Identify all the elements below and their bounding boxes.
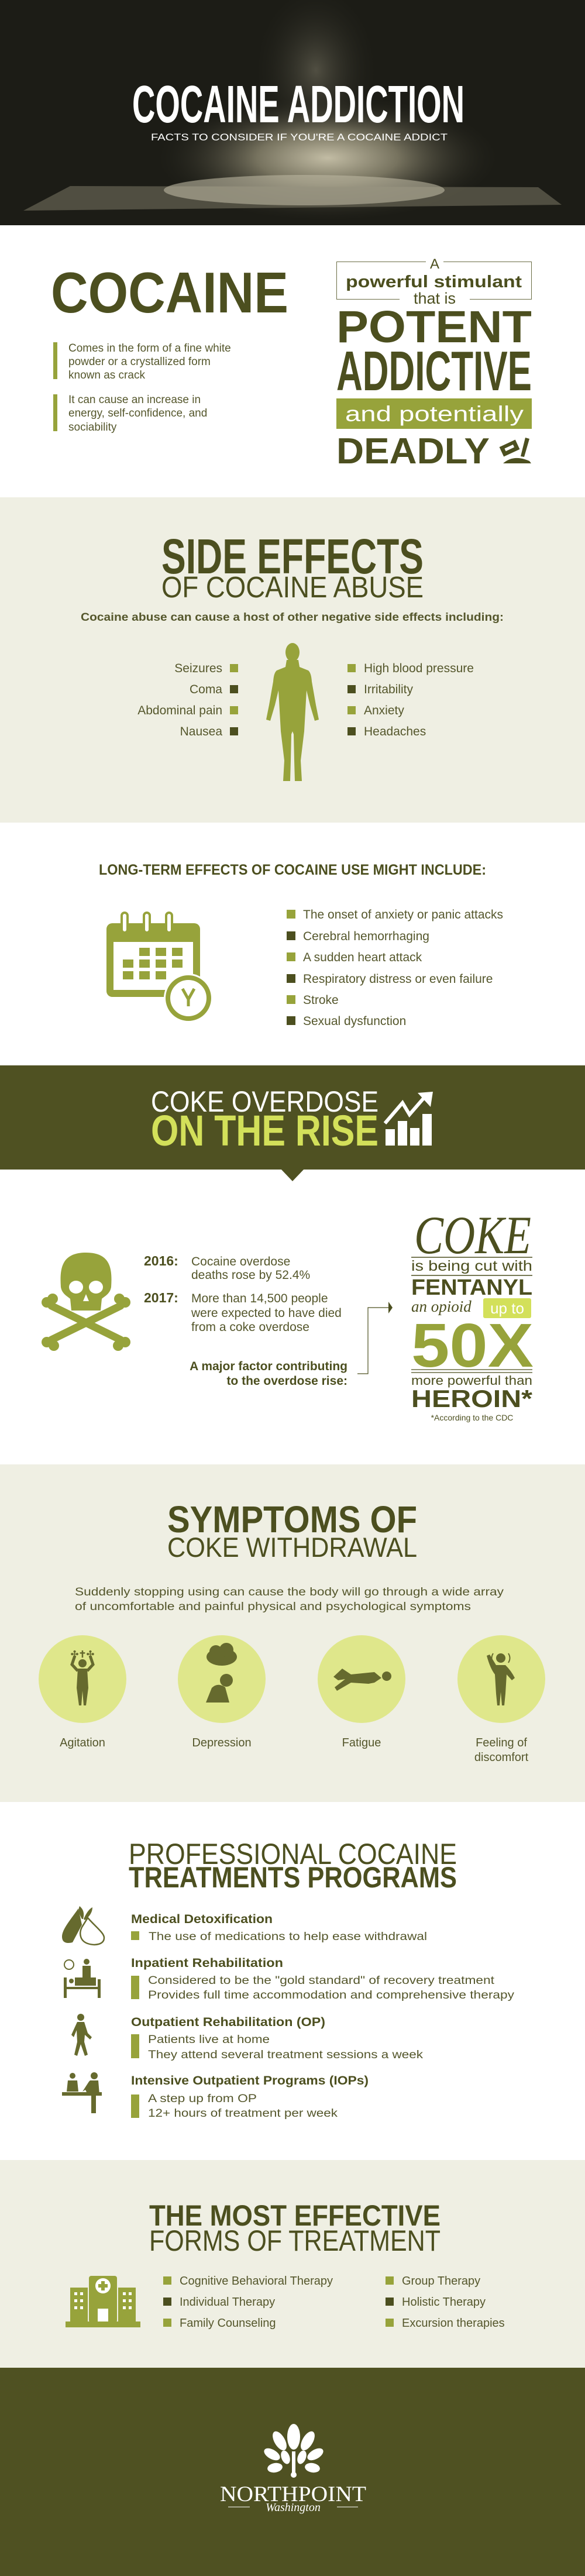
heading: most effective xyxy=(149,2199,441,2257)
bullet: form: Comes in the form of a fine white xyxy=(68,342,231,355)
typographic callout: powerful stimulant xyxy=(346,273,522,291)
heading: on the rise: ON THE RISE xyxy=(151,1106,378,1155)
program: medical detox: Medical Detoxification xyxy=(131,1913,273,1926)
stat: 2017: from a coke overdose xyxy=(191,1320,309,1334)
heading: most effective: THE MOST EFFECTIVE xyxy=(149,2199,441,2232)
symptom: agitation: ✣✝✣ xyxy=(71,1650,95,1660)
bullet: effects: sociability xyxy=(68,421,117,434)
list: right side effects: High blood pressure xyxy=(364,662,474,675)
program: IOP: 12+ hours of treatment per week xyxy=(148,2107,338,2120)
heading: treatment programs xyxy=(129,1838,457,1894)
list: left side effects: Abdominal pain xyxy=(137,704,222,717)
bullet: effects: It can cause an increase in xyxy=(68,394,201,406)
panel: withdrawal symptoms xyxy=(0,1464,585,1802)
symptom: depression: Depression xyxy=(192,1736,252,1749)
bullet: form: powder or a crystallized form xyxy=(68,356,211,368)
text: major factor: to the overdose rise: xyxy=(226,1374,347,1388)
symptom: agitation xyxy=(39,1635,126,1749)
program: IOP xyxy=(62,2072,369,2120)
program: inpatient: Inpatient Rehabilitation xyxy=(131,1956,283,1970)
list: long-term effects: Stroke xyxy=(303,993,339,1007)
stat: 2017: More than 14,500 people xyxy=(191,1292,328,1305)
panel: long-term effects xyxy=(99,862,503,1028)
stat: 2016: 2016: xyxy=(144,1253,178,1268)
program: inpatient: Provides full time accommodation and comprehensive therapy xyxy=(148,1989,515,2001)
list: treatments column 2: Group Therapy xyxy=(402,2275,480,2288)
footer: logo xyxy=(0,2368,585,2576)
list: right side effects: Irritability xyxy=(364,683,414,696)
program: medical detox: The use of medications to help ease withdrawal xyxy=(149,1931,427,1943)
icon: hospital building xyxy=(66,2276,140,2327)
list: left side effects xyxy=(137,662,238,738)
hero banner xyxy=(0,0,585,225)
stat: 2017: 2017: xyxy=(144,1290,178,1305)
list: treatments column 2: Excursion therapies xyxy=(402,2317,505,2330)
heading: treatment programs: PROFESSIONAL COCAINE xyxy=(129,1838,457,1870)
symptom: fatigue: Fatigue xyxy=(342,1736,381,1749)
list: long-term effects: A sudden heart attack xyxy=(303,951,422,964)
icon: peacock logo xyxy=(262,2424,325,2478)
panel: overdose banner xyxy=(0,1065,585,1181)
heading: symptoms: COKE WITHDRAWAL xyxy=(167,1532,417,1563)
list: treatments column 1: Family Counseling xyxy=(180,2317,276,2330)
intro text: Cocaine abuse can cause a host of other negative side effects including: xyxy=(81,611,504,624)
callout: fentanyl: HEROIN* xyxy=(411,1385,533,1412)
heading: treatment programs: TREATMENTS PROGRAMS xyxy=(129,1861,457,1894)
bullet: form xyxy=(53,342,231,381)
program: inpatient: Considered to be the "gold standard" of recovery treatment xyxy=(148,1975,495,1987)
symptom: fatigue xyxy=(318,1635,405,1749)
list: right side effects xyxy=(347,662,474,738)
heading: side effects: OF COCAINE ABUSE xyxy=(161,570,424,604)
callout: fentanyl: an opioid xyxy=(411,1298,472,1315)
program: medical detox xyxy=(62,1906,427,1945)
panel: side effects xyxy=(0,497,585,823)
callout: fentanyl: 50X xyxy=(411,1311,534,1380)
stat: 2016: Cocaine overdose xyxy=(191,1255,290,1268)
heading: side effects: SIDE EFFECTS xyxy=(161,529,424,584)
bullet: effects xyxy=(53,394,207,434)
callout: fentanyl xyxy=(411,1205,534,1422)
callout: fentanyl: *According to the CDC xyxy=(431,1413,513,1422)
list: treatments column 1: Cognitive Behavioral Therapy xyxy=(180,2275,333,2288)
panel: treatment programs xyxy=(62,1838,515,2120)
heading: most effective: FORMS OF TREATMENT xyxy=(149,2224,441,2257)
list: long-term effects xyxy=(287,908,503,1028)
panel: overdose facts xyxy=(42,1205,534,1422)
stat: 2016: deaths rose by 52.4% xyxy=(191,1268,310,1282)
program: outpatient: Patients live at home xyxy=(148,2034,270,2046)
subtitle: FACTS TO CONSIDER IF YOU'RE A COCAINE ADDICT xyxy=(151,132,448,143)
list: long-term effects: Sexual dysfunction xyxy=(303,1014,406,1028)
bullet: effects: energy, self-confidence, and xyxy=(68,407,207,419)
list: left side effects: Seizures xyxy=(174,662,222,675)
icon: skull and crossbones xyxy=(42,1253,130,1351)
typographic callout xyxy=(336,256,532,472)
list: long-term effects: The onset of anxiety or panic attacks xyxy=(303,908,503,921)
panel: effective treatment xyxy=(0,2160,585,2368)
intro text: of uncomfortable and painful physical and psychological symptoms xyxy=(75,1601,471,1613)
heading: cocaine: COCAINE xyxy=(51,260,288,325)
bullet: form: known as crack xyxy=(68,369,145,381)
list: right side effects: Anxiety xyxy=(364,704,404,717)
list: long-term effects: Cerebral hemorrhaging xyxy=(303,930,429,943)
icon: human body xyxy=(266,643,319,781)
list: treatments column 1: Individual Therapy xyxy=(180,2296,275,2309)
stat: 2017 xyxy=(144,1290,342,1334)
callout: fentanyl: up to xyxy=(490,1299,524,1317)
list: right side effects: Headaches xyxy=(364,725,426,738)
typographic callout: A xyxy=(430,256,439,272)
icon: razor blade xyxy=(500,438,531,463)
list: left side effects: Nausea xyxy=(180,725,222,738)
icon: hospital bed xyxy=(64,1959,101,1998)
icon: calendar with clock xyxy=(106,913,213,1023)
typographic callout: DEADLY xyxy=(336,431,490,472)
heading: long-term: LONG-TERM EFFECTS OF COCAINE USE MIGHT INCLUDE: xyxy=(99,862,486,878)
icon: rising chart xyxy=(385,1092,433,1146)
icon: counselor desk xyxy=(62,2072,102,2113)
callout: fentanyl: more powerful than xyxy=(411,1373,532,1388)
icon: detox drops xyxy=(62,1906,104,1945)
text: northpoint: NORTHPOINT xyxy=(220,2482,366,2506)
list: treatments column 2: Holistic Therapy xyxy=(402,2296,486,2309)
list: left side effects: Coma xyxy=(190,683,222,696)
symptom: feeling of discomfort: Feeling of xyxy=(476,1736,527,1749)
program: IOP: Intensive Outpatient Programs (IOPs) xyxy=(131,2074,369,2087)
list: treatments column 1 xyxy=(163,2275,333,2330)
typographic callout: and potentially xyxy=(345,402,524,426)
stat: 2016 xyxy=(144,1253,310,1282)
symptom: feeling of discomfort xyxy=(457,1635,545,1764)
heading: side effects xyxy=(161,529,424,604)
heading: symptoms xyxy=(167,1498,417,1563)
text: major factor: A major factor contributing xyxy=(190,1360,347,1373)
program: outpatient xyxy=(71,2014,424,2061)
text: washington: Washington xyxy=(266,2501,321,2514)
symptom: depression xyxy=(178,1635,266,1749)
symptom: feeling of discomfort: discomfort xyxy=(474,1751,529,1764)
stat: 2017: were expected to have died xyxy=(191,1306,342,1320)
heading: coke overdose: COKE OVERDOSE xyxy=(151,1085,378,1118)
callout: fentanyl: is being cut with xyxy=(411,1258,532,1274)
arrow: connector xyxy=(357,1302,393,1374)
callout: fentanyl: FENTANYL xyxy=(411,1275,532,1300)
program: outpatient: Outpatient Rehabilitation (OP) xyxy=(131,2016,325,2029)
callout: fentanyl: COKE xyxy=(414,1205,531,1265)
typographic callout: that is xyxy=(414,290,456,307)
panel: cocaine intro xyxy=(51,256,532,472)
list: long-term effects: Respiratory distress or even failure xyxy=(303,972,493,986)
typographic callout: POTENT xyxy=(336,302,532,352)
program: inpatient xyxy=(64,1956,515,2001)
icon: walking person xyxy=(71,2014,92,2056)
list: treatments column 2 xyxy=(386,2275,505,2330)
symptom: agitation: Agitation xyxy=(60,1736,105,1749)
intro text: Suddenly stopping using can cause the body will go through a wide array xyxy=(75,1586,504,1598)
program: outpatient: They attend several treatment sessions a week xyxy=(148,2049,424,2061)
program: IOP: A step up from OP xyxy=(148,2093,257,2105)
heading: symptoms: SYMPTOMS OF xyxy=(167,1498,417,1540)
